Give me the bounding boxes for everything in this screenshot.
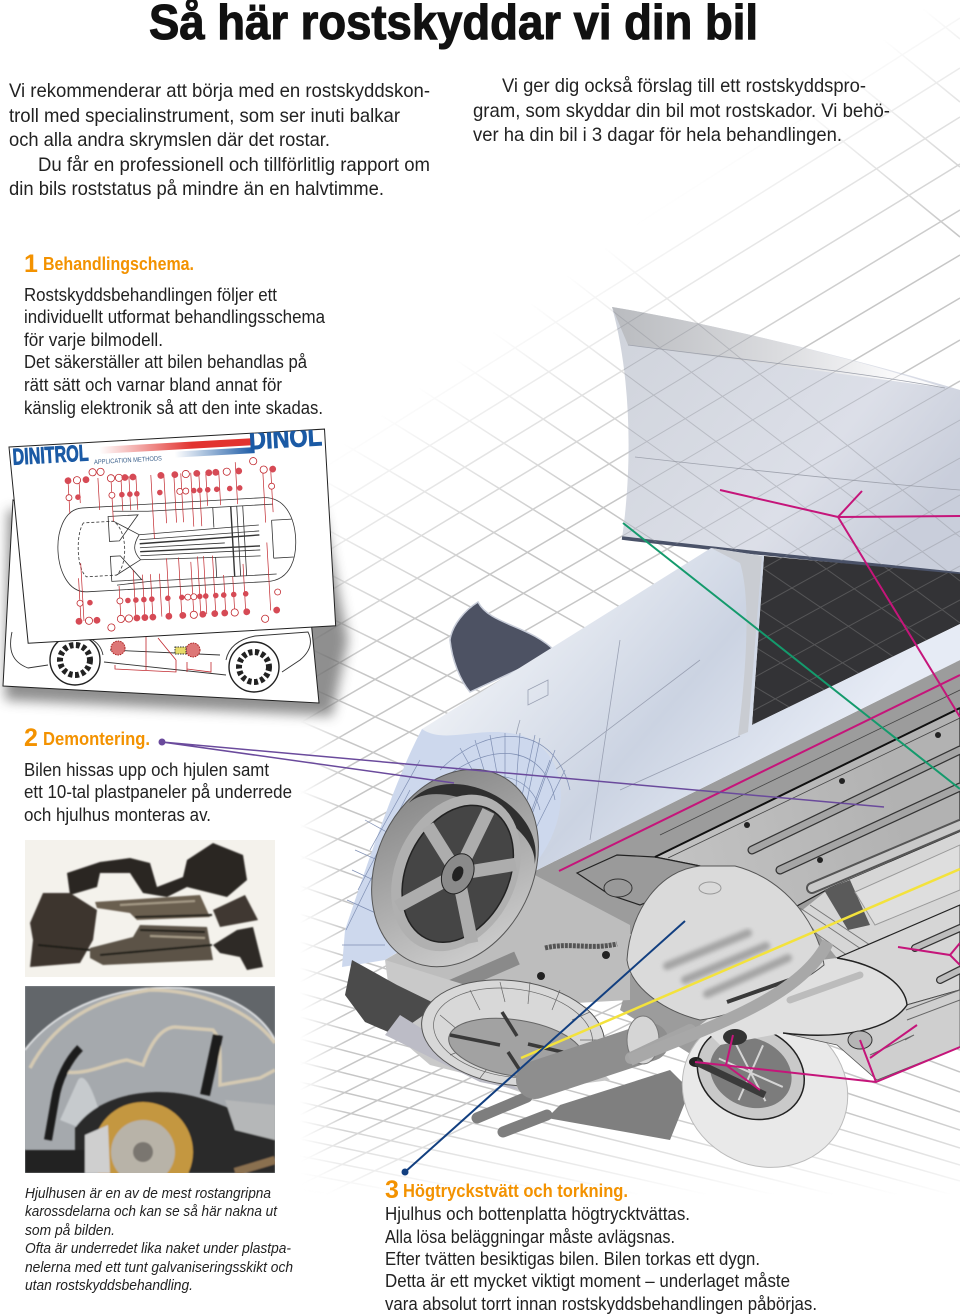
heading: step 1 <box>24 250 194 278</box>
heading: step 3 <box>385 1176 628 1204</box>
caption: utan rostskyddsbehandling. <box>25 1278 193 1294</box>
text block: intro left: Du får en professionell och tillförlitlig rapport om <box>38 154 430 176</box>
inner wheel arch piece <box>450 602 556 692</box>
text block: step 2: Bilen hissas upp och hjulen samt <box>24 760 269 780</box>
text block: step 2 <box>24 760 292 825</box>
side body <box>422 548 960 870</box>
marker dot: step 3 <box>402 1168 408 1176</box>
suspension <box>604 879 765 1095</box>
back sheet: side view <box>3 500 319 703</box>
hood panel <box>612 307 960 574</box>
front wheel <box>371 768 539 968</box>
text block: intro left: Vi rekommenderar att börja med en rostskyddskon- <box>9 80 430 102</box>
undertray <box>547 1070 690 1140</box>
text block: intro right: gram, som skyddar din bil mot rostskador. Vi behö- <box>473 100 890 122</box>
logo: dinitrol: DINITROL <box>12 440 89 470</box>
text block: intro right: Vi ger dig också förslag till ett rostskyddspro- <box>502 75 866 97</box>
caption: Hjulhusen är en av de mest rostangripna <box>25 1186 271 1202</box>
underbody diagram <box>56 496 298 593</box>
exhaust <box>477 1016 690 1132</box>
heading: step 3: 3 <box>385 1176 399 1204</box>
color bars <box>99 438 255 462</box>
caption: som på bilden. <box>25 1223 115 1239</box>
text block: step 1: rätt sätt och varnar bland annat för <box>24 375 282 395</box>
text block: step 1: Det säkerställer att bilen behandlas på <box>24 352 308 372</box>
heading: step 2: 2 <box>24 724 38 752</box>
text block: intro left: din bils roststatus på mindre än en halvtimme. <box>9 178 384 200</box>
text block: intro left: troll med specialinstrument, som ser inuti balkar <box>9 105 400 127</box>
rear wheel <box>682 1033 848 1168</box>
marker dot: step 2 <box>158 738 166 746</box>
fender mesh <box>342 729 570 967</box>
sheet shadow <box>5 510 348 716</box>
floor plate <box>577 690 960 913</box>
front under-structure <box>385 873 630 1005</box>
photo: removed plastic panels <box>25 840 275 977</box>
rear floor panels <box>700 905 960 1080</box>
text block: intro left <box>9 80 430 200</box>
text block: step 1: individuellt utformat behandlingsschema <box>24 307 326 327</box>
centre gap panel <box>800 832 960 958</box>
text block: step 3 <box>385 1204 817 1314</box>
text block: intro right: ver ha din bil i 3 dagar för hela behandlingen. <box>473 124 842 146</box>
text block: intro right <box>473 75 890 146</box>
caption <box>25 1186 293 1294</box>
front arm <box>450 942 618 984</box>
text block: step 2: och hjulhus monteras av. <box>24 805 211 825</box>
text block: step 2: ett 10-tal plastpaneler på underrede <box>24 782 292 802</box>
window <box>752 556 960 725</box>
door pillar <box>711 548 762 736</box>
text block: step 3: Detta är ett mycket viktigt moment – underlaget måste <box>385 1271 790 1291</box>
heading: step 3: Högtryckstvätt och torkning. <box>403 1180 628 1201</box>
spare wheel well <box>421 979 604 1086</box>
text block: step 1 <box>24 285 326 418</box>
floor base <box>531 660 960 1080</box>
text block: step 3: Efter tvätten besiktigas bilen. Bilen torkas ett dygn. <box>385 1249 760 1269</box>
text block: step 1: känslig elektronik så att den inte skadas. <box>24 398 323 418</box>
heading: step 1: Behandlingschema. <box>43 253 194 274</box>
car illustration <box>165 307 960 1170</box>
logo: dinol: DINOL <box>248 420 323 455</box>
label: application methods: APPLICATION METHODS <box>94 455 163 466</box>
pointer lines <box>162 490 960 1172</box>
text block: step 3: Hjulhus och bottenplatta högtrycktvättas. <box>385 1204 690 1224</box>
front sheet <box>8 420 336 644</box>
caption: Ofta är underredet lika naket under plastpa- <box>25 1241 291 1257</box>
bumper <box>345 960 610 1092</box>
caption: nelerna med ett tunt galvaniseringsskikt och <box>25 1260 293 1276</box>
text block: step 1: Rostskyddsbehandlingen följer ett <box>24 285 277 305</box>
sheets: application methods <box>3 420 348 716</box>
heading: step 2 <box>24 724 150 752</box>
tank <box>627 866 828 1060</box>
text block: step 3: vara absolut torrt innan rostskyddsbehandlingen påbörjas. <box>385 1294 817 1314</box>
caption: karossdelarna och kan se så här nakna ut <box>25 1204 278 1220</box>
heading: step 2: Demontering. <box>43 728 150 749</box>
heading: step 1: 1 <box>24 250 38 278</box>
photo: wheel well <box>25 986 275 1173</box>
text block: step 3: Alla lösa beläggningar måste avlägsnas. <box>385 1227 675 1247</box>
marker rows <box>64 456 285 633</box>
text block: intro left: och alla andra skrymslen där det rostar. <box>9 129 330 151</box>
floor ribs <box>752 750 960 870</box>
text block: step 1: för varje bilmodell. <box>24 330 163 350</box>
